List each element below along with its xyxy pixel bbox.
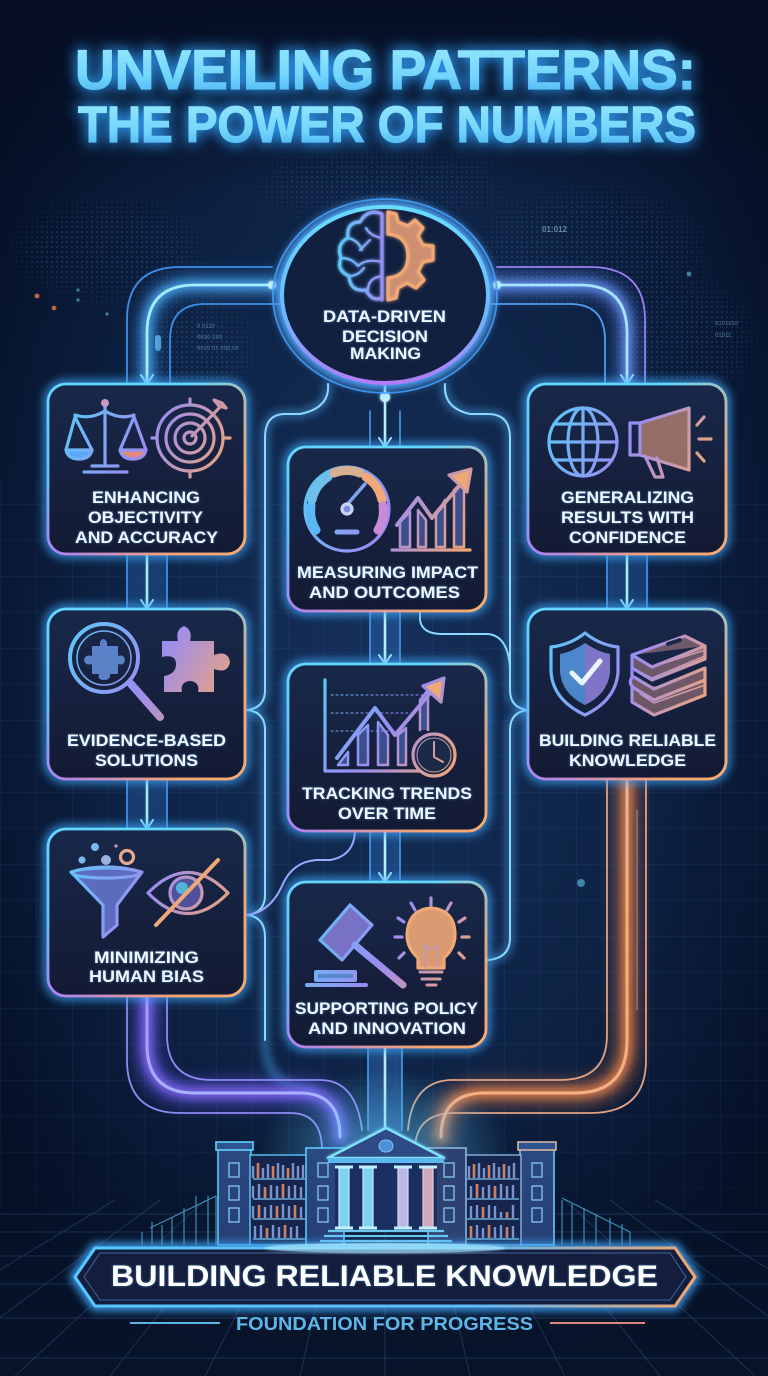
card label: MINIMIZING — [94, 948, 199, 967]
panel: supporting policy and innovation — [288, 882, 486, 1047]
card label: AND ACCURACY — [75, 528, 219, 547]
panel: generalizing results with confidence — [528, 384, 726, 554]
connectors — [127, 267, 647, 1150]
icon: shield and books — [551, 633, 705, 715]
card label: TRACKING TRENDS — [302, 784, 472, 803]
background: 0010 01 000.00 — [197, 346, 239, 352]
banner: building reliable knowledge — [75, 1243, 695, 1306]
card label: ENHANCING — [92, 488, 200, 507]
bookshelves — [253, 1163, 519, 1239]
icon: gauge and rising chart — [305, 467, 471, 551]
card label: KNOWLEDGE — [569, 751, 686, 770]
card label — [89, 948, 204, 986]
title: UNVEILING PATTERNS: — [75, 38, 696, 101]
icon: gavel and light bulb — [307, 898, 469, 985]
title — [75, 38, 696, 153]
card label: OVER TIME — [338, 804, 436, 823]
hub label — [323, 307, 446, 363]
card label: RESULTS WITH — [561, 508, 694, 527]
hub: data-driven decision making — [273, 199, 497, 393]
card label: SUPPORTING POLICY — [295, 999, 479, 1018]
hub label: MAKING — [350, 344, 421, 363]
card label: HUMAN BIAS — [89, 967, 204, 986]
title: THE POWER OF NUMBERS — [78, 96, 696, 153]
card label: OBJECTIVITY — [88, 508, 204, 527]
connector: right bus — [420, 384, 528, 960]
building: library foundation — [142, 1070, 630, 1245]
connector: right trunk to building — [408, 779, 646, 1150]
connector: centre column links — [368, 384, 402, 1140]
temple portico — [316, 1128, 456, 1245]
icon: globe and megaphone — [549, 408, 711, 477]
card label: AND INNOVATION — [308, 1019, 466, 1038]
card label: BUILDING RELIABLE — [539, 731, 716, 750]
connector: right column links — [607, 554, 647, 609]
card label — [302, 784, 472, 823]
tagline: foundation for progress: FOUNDATION FOR PROGRESS — [236, 1314, 533, 1334]
panel: evidence-based solutions — [48, 609, 245, 779]
panel: minimizing human bias — [48, 829, 245, 996]
background: 0 0110 — [197, 324, 216, 330]
card label — [295, 999, 479, 1038]
card label — [561, 488, 694, 547]
card label: GENERALIZING — [561, 488, 694, 507]
card label: AND OUTCOMES — [309, 583, 460, 602]
connector: left bus — [247, 384, 355, 1090]
connector: right branch from hub — [490, 267, 645, 384]
hub label: DATA-DRIVEN — [323, 307, 446, 326]
icon: funnel and crossed eye — [71, 843, 228, 937]
connector: left branch from hub — [127, 267, 282, 384]
background: 01011 — [715, 333, 732, 339]
panel: enhancing objectivity and accuracy — [48, 384, 245, 554]
panel: building reliable knowledge — [528, 609, 726, 779]
title: UNVEILING PATTERNS: — [75, 38, 696, 101]
connector: left trunk to building — [127, 996, 362, 1150]
card label: SOLUTIONS — [95, 751, 198, 770]
card label: EVIDENCE-BASED — [67, 731, 226, 750]
background: 0010 100 — [197, 335, 223, 341]
data bars beside building — [142, 1196, 630, 1245]
panel: tracking trends over time — [288, 664, 486, 831]
banner: building reliable knowledge: BUILDING RELIABLE KNOWLEDGE — [111, 1260, 658, 1293]
card label — [539, 731, 716, 770]
title: THE POWER OF NUMBERS — [78, 96, 696, 153]
data readout: 01:012 — [542, 225, 567, 234]
card label: MEASURING IMPACT — [297, 563, 479, 582]
hub label: DECISION — [342, 327, 428, 346]
icon: brain and gear — [340, 212, 433, 300]
panel: measuring impact and outcomes — [288, 447, 486, 611]
icon: scales and target — [66, 399, 230, 477]
card label — [67, 731, 226, 770]
background: 0101010 — [715, 321, 739, 327]
icon: magnifier and puzzle piece — [70, 624, 230, 717]
card label — [297, 563, 479, 602]
card label — [75, 488, 219, 547]
connector: left column links — [127, 554, 167, 829]
icon: trend chart and clock — [325, 678, 455, 776]
card label: CONFIDENCE — [569, 528, 686, 547]
